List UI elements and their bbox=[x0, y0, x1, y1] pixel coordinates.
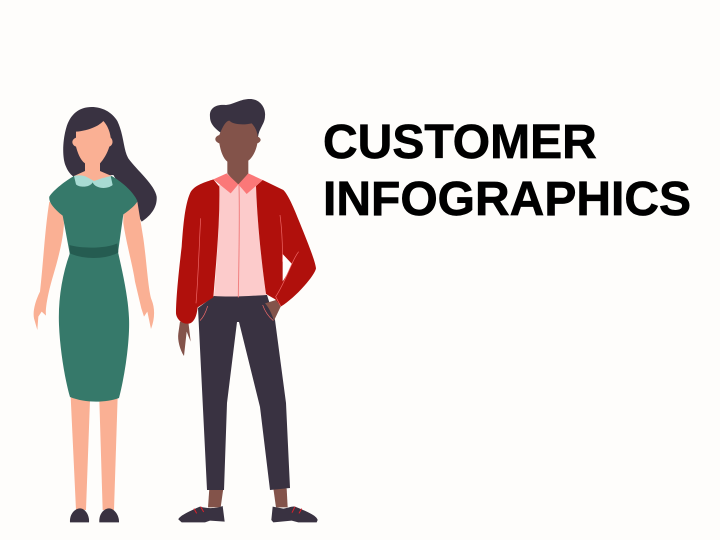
woman shoes bbox=[70, 508, 119, 522]
man collar bbox=[213, 173, 263, 194]
woman arms bbox=[34, 202, 154, 330]
woman hair bbox=[63, 107, 157, 222]
man face and neck bbox=[215, 121, 261, 187]
title: INFOGRAPHICS bbox=[323, 173, 691, 226]
woman belt bbox=[69, 243, 118, 258]
title: CUSTOMER bbox=[323, 116, 597, 169]
woman dress bodice bbox=[49, 176, 137, 255]
woman dress skirt bbox=[59, 252, 129, 402]
man left hand bbox=[178, 322, 191, 356]
figure: man in red jacket bbox=[176, 99, 318, 522]
woman face and neck bbox=[72, 121, 113, 183]
man ankles bbox=[208, 488, 288, 507]
woman collar bbox=[74, 175, 113, 188]
title bbox=[323, 116, 691, 226]
man hair bbox=[210, 99, 265, 137]
man jacket bbox=[176, 179, 316, 324]
figure: woman in green dress bbox=[34, 107, 157, 522]
man shoes bbox=[178, 506, 318, 522]
woman legs bbox=[71, 397, 118, 510]
man shirt bbox=[214, 184, 266, 297]
man right hand and pockets bbox=[200, 300, 281, 321]
man trousers bbox=[198, 295, 290, 490]
